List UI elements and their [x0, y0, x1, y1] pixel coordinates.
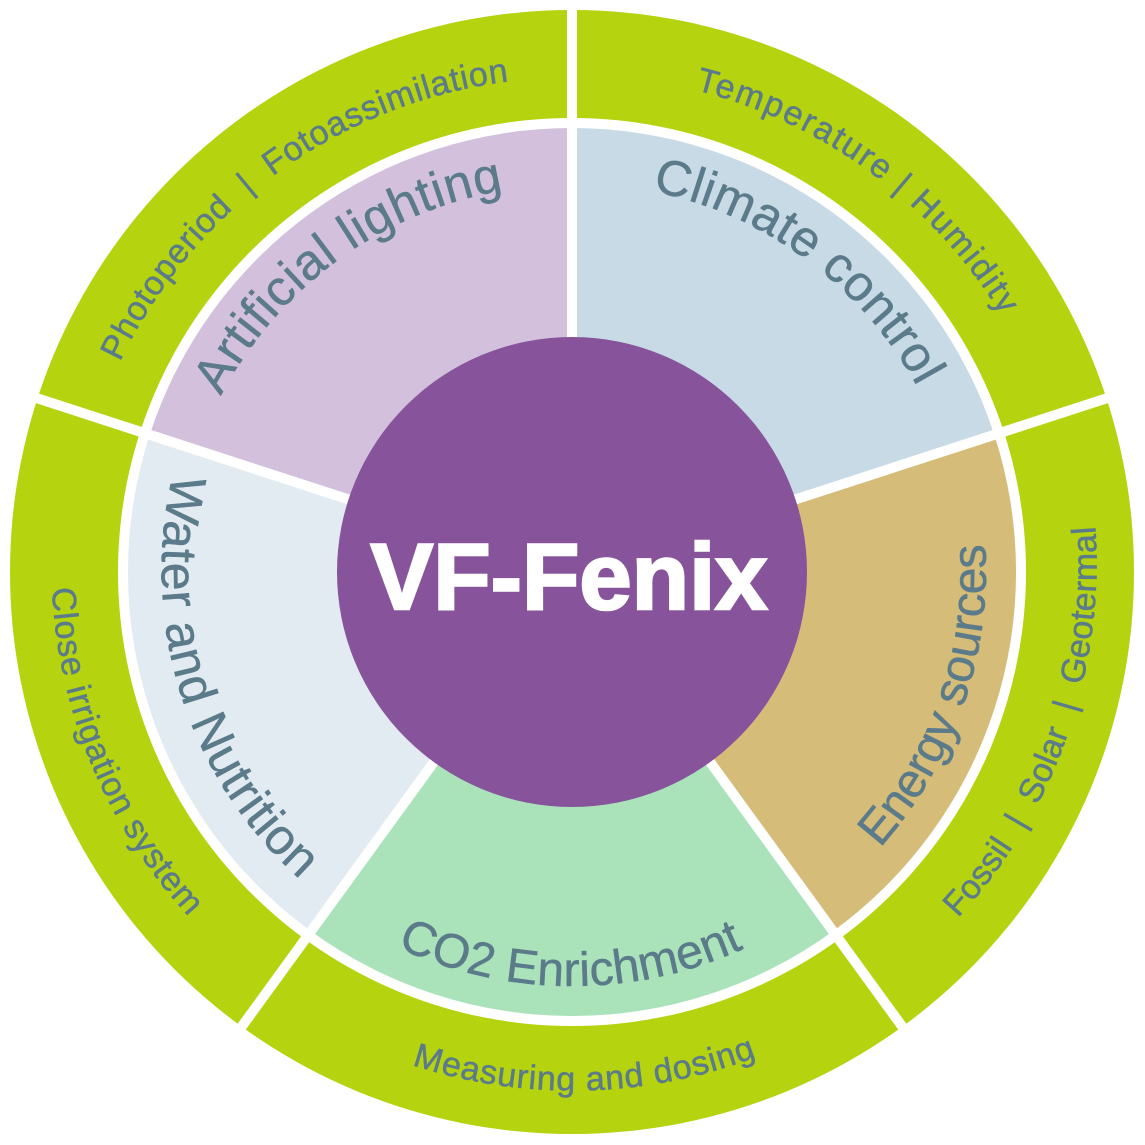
panel: water and nutrition: [128, 435, 572, 931]
label: water and nutrition: Water and Nutrition: [161, 480, 314, 878]
panel: CO2 enrichment: [311, 572, 833, 1016]
label: photoperiod and fotoassimilation: Photoperiod | Fotoassimilation: [100, 64, 507, 360]
label: CO2 enrichment: CO2 Enrichment: [404, 922, 744, 986]
panel: artificial lighting: [150, 128, 572, 572]
label: temperature and humidity: Temperature | Humidity: [700, 67, 1017, 310]
title: VF-Fenix: [371, 524, 767, 629]
label: measuring and dosing: Measuring and dosing: [414, 1040, 755, 1098]
label: artificial lighting: Artificial lighting: [198, 164, 501, 396]
label: close irrigation system: Close irrigation system: [52, 588, 200, 916]
ring gap: [118, 118, 1026, 1026]
label: climate control: Climate control: [658, 160, 948, 384]
panel: energy sources: [572, 435, 1016, 931]
label: fossil, solar, geotermal: Fossil | Solar | Geotermal: [942, 528, 1097, 916]
center circle: [337, 337, 807, 807]
panel: climate control: [572, 128, 994, 572]
label: energy sources: Energy sources: [856, 546, 987, 846]
